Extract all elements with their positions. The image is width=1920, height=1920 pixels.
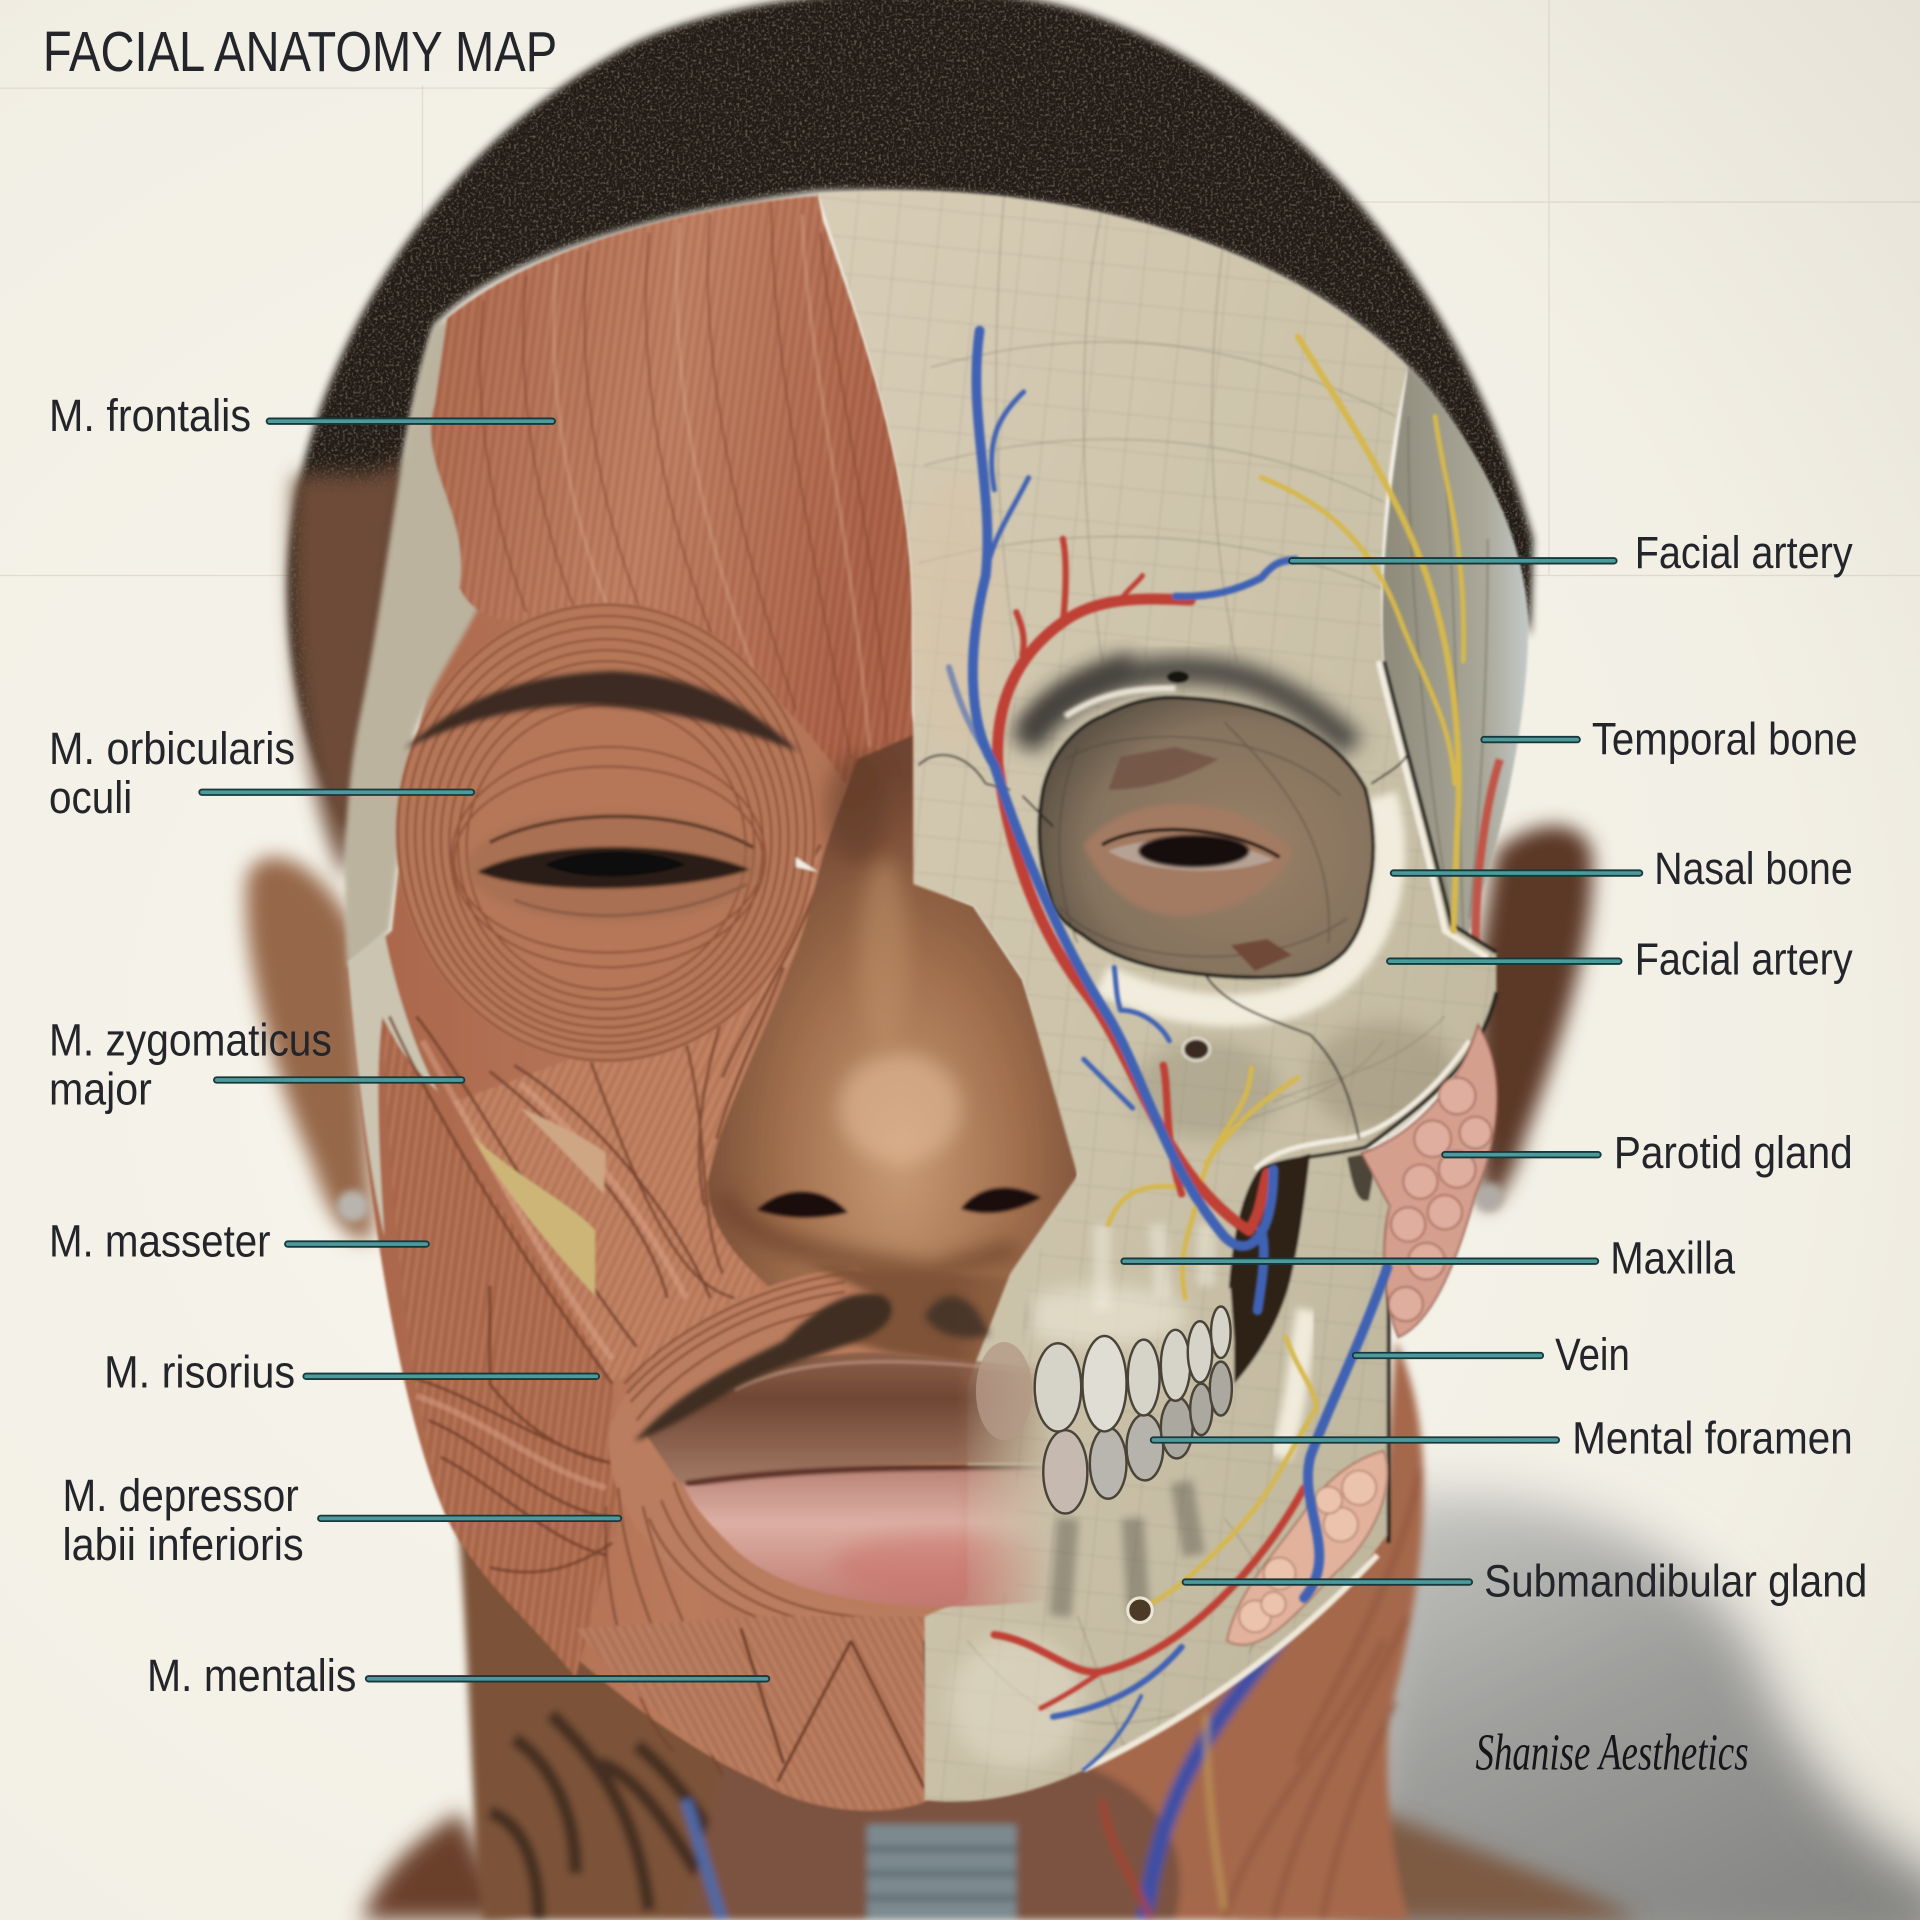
label: Facial artery upper: Facial artery (1635, 527, 1853, 578)
eye socket (1022, 661, 1389, 1010)
muscle: orbicularis oris (603, 1268, 943, 1775)
label: M. zygomaticus major: M. zygomaticus (49, 1015, 332, 1066)
ramus highlights (1280, 1310, 1308, 1457)
skin: nose (708, 735, 1078, 1359)
neck tattooed left (458, 1518, 857, 1920)
eyelids (1084, 804, 1292, 916)
temporal muscle strip (1382, 367, 1528, 949)
label: M. frontalis: M. frontalis (49, 390, 251, 441)
labels right (1124, 527, 1867, 1607)
left jaw tendon (348, 933, 438, 1237)
trachea (867, 1824, 1016, 1920)
muscle: frontalis (431, 196, 912, 784)
foramina (1183, 1038, 1210, 1060)
mouth (634, 1294, 1065, 1606)
skull edges (1231, 661, 1496, 1288)
mental foramen hole (1128, 1598, 1152, 1622)
ears (246, 826, 1593, 1240)
neck vessels (1145, 1629, 1286, 1920)
parotid gland (1362, 1025, 1497, 1337)
label: M. zygomaticus major: major (49, 1063, 152, 1114)
skin: upper lip area (817, 1264, 1006, 1363)
left shoulder (361, 1812, 514, 1920)
muscle: cheek and masseter (382, 845, 845, 1678)
label: Parotid gland: Parotid gland (1614, 1127, 1853, 1178)
label: Submandibular gland: Submandibular gland (1484, 1556, 1867, 1607)
right ear (1476, 826, 1593, 1206)
label: M. orbicularis oculi (49, 723, 471, 823)
skull (818, 189, 1500, 1804)
arteries red (994, 539, 1304, 1708)
moustache right (924, 1296, 989, 1338)
label: M. orbicularis oculi: oculi (49, 772, 132, 823)
bone curved lines (918, 196, 1445, 1751)
lower lip (683, 1467, 1065, 1606)
label: M. depressor labii inferioris: M. depressor (62, 1470, 299, 1521)
hair (288, 0, 1533, 833)
face base muscle (347, 193, 1035, 1811)
vessels and nerves (949, 331, 1464, 1769)
neck muscle right (1078, 1341, 1424, 1920)
muscle: mentalis (576, 1616, 931, 1810)
label: M. masseter: M. masseter (49, 1215, 271, 1266)
label: Facial artery lower: Facial artery (1635, 934, 1853, 985)
labels left (49, 390, 767, 1701)
right shoulder (1224, 1812, 1641, 1920)
left temple fade (292, 453, 410, 882)
label: Nasal bone: Nasal bone (1654, 843, 1853, 894)
bone shading (906, 478, 1457, 1769)
label: Maxilla: Maxilla (1610, 1232, 1736, 1283)
eyebrow (404, 671, 798, 752)
teeth (976, 1307, 1232, 1513)
title: FACIAL ANATOMY MAP (43, 20, 557, 83)
eye lids (465, 812, 759, 922)
socket curved lines (1059, 722, 1347, 957)
label: Mental foramen: Mental foramen (1572, 1412, 1853, 1463)
nerves yellow (1108, 337, 1464, 1607)
neck centre (686, 1714, 1237, 1920)
label: M. zygomaticus major (49, 1015, 462, 1114)
veins blue (949, 331, 1387, 1769)
label: Vein: Vein (1555, 1329, 1630, 1380)
label: M. depressor labii inferioris (62, 1470, 618, 1570)
left ear (246, 857, 373, 1240)
muscle: orbicularis oculi (396, 602, 817, 1063)
label: M. orbicularis oculi: M. orbicularis (49, 723, 295, 774)
left temple tendon (345, 306, 490, 967)
label: M. risorius: M. risorius (104, 1346, 295, 1397)
upper lip (647, 1352, 1065, 1484)
earrings (337, 1183, 1504, 1222)
bone grid (849, 200, 1490, 1800)
label: M. mentalis: M. mentalis (147, 1650, 356, 1701)
shoulders and neck (361, 1341, 1641, 1920)
cast shadow (1347, 1495, 1920, 1920)
cavity (1231, 1153, 1310, 1384)
submandibular gland (1227, 1451, 1387, 1645)
face group (345, 193, 1078, 1811)
moustache left (634, 1294, 892, 1441)
label: Temporal bone: Temporal bone (1592, 713, 1858, 764)
sutures (918, 753, 1408, 1139)
fat patch (473, 1136, 595, 1296)
label: M. depressor labii inferioris: labii inferioris (62, 1519, 304, 1570)
signature: Shanise Aesthetics (1476, 1724, 1749, 1781)
